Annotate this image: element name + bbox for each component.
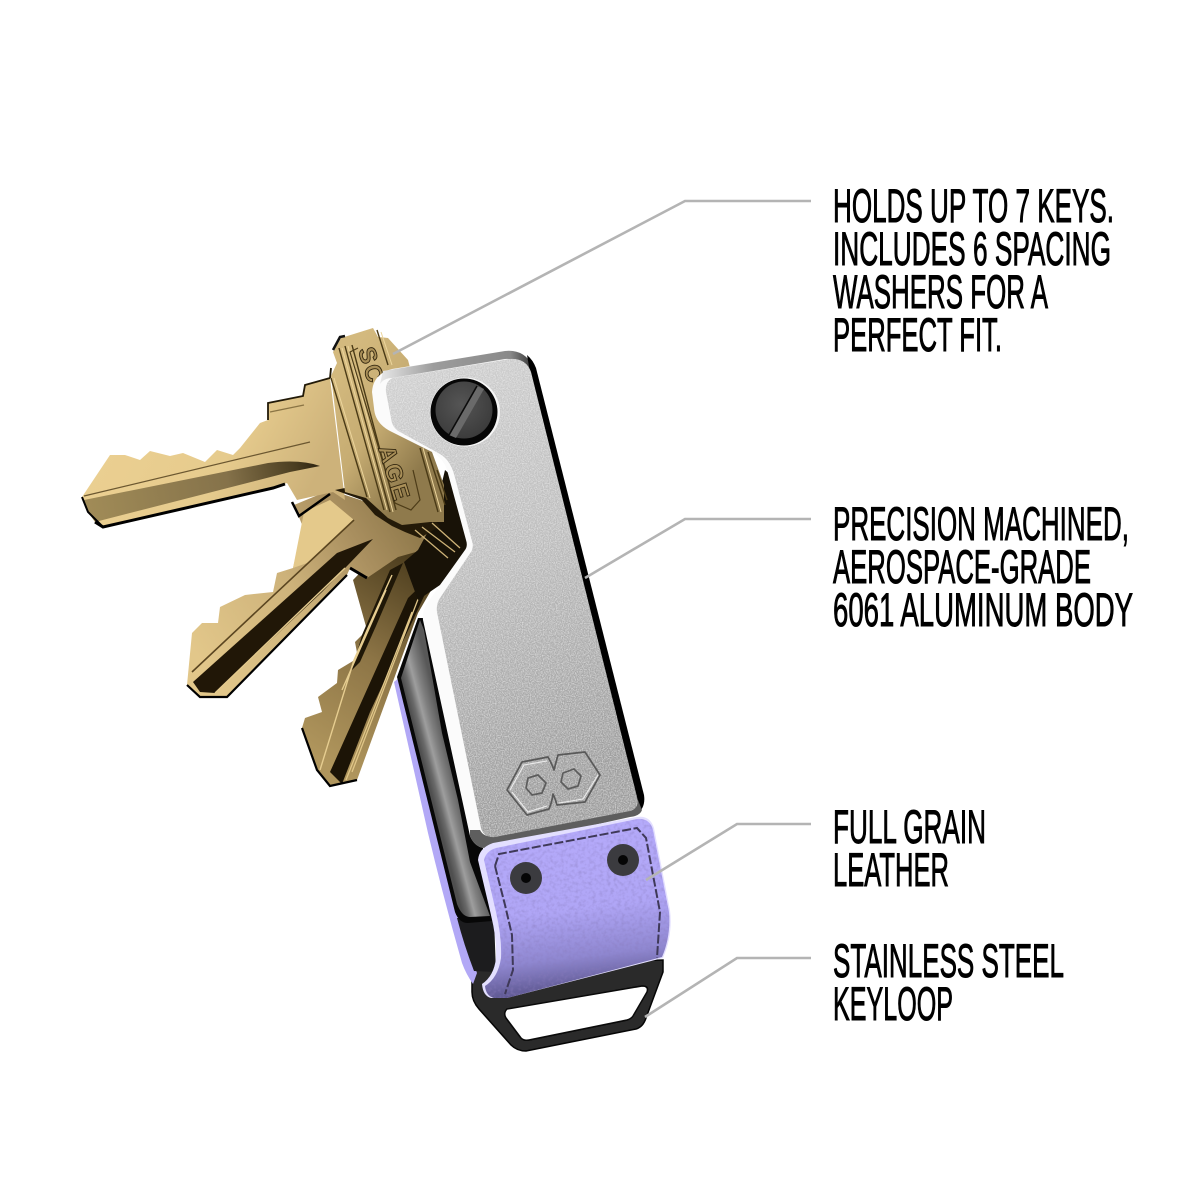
strap shadow gap	[457, 918, 496, 972]
key: middle brass key	[187, 490, 445, 697]
text block: leather	[833, 801, 986, 897]
key: lower brass key	[302, 545, 453, 786]
leather strap front	[478, 817, 671, 998]
text block: aluminum body	[833, 498, 1133, 637]
body outer bevel	[372, 351, 643, 848]
body side wall outer	[397, 618, 492, 923]
strap: back of leather band	[394, 677, 477, 984]
aluminum body	[372, 351, 644, 848]
body brushed face	[386, 359, 638, 837]
illustration: key organizer	[82, 328, 671, 1051]
body bottom bevel	[470, 800, 642, 848]
keyloop: stainless steel	[472, 960, 663, 1051]
head ridges	[331, 330, 447, 512]
leader line: leather	[646, 824, 811, 880]
body side wall	[401, 620, 490, 917]
embossed logo	[507, 752, 600, 815]
brand lettering	[352, 344, 415, 505]
leader line: aluminum body	[585, 519, 811, 578]
dark shadow inside body notch	[404, 470, 468, 600]
body top edge	[380, 351, 533, 384]
leader line: keyloop	[645, 958, 811, 1017]
lower stacked key ridges	[415, 523, 460, 558]
head bottom serrated shadow	[335, 488, 440, 538]
body right black edge	[527, 355, 644, 815]
text block: holds up to 7 keys: PERFECT FIT.	[833, 309, 1002, 362]
key: top brass key	[82, 368, 345, 527]
stitching	[495, 828, 660, 994]
text block: keyloop: KEYLOOP	[833, 978, 953, 1031]
key head with embossed brand	[331, 328, 460, 558]
text block: holds up to 7 keys	[833, 180, 1114, 362]
pivot screw	[430, 378, 500, 446]
brand lettering: AGE	[372, 442, 415, 505]
brand lettering: SC	[352, 344, 389, 387]
rivet left	[510, 862, 542, 894]
text block: leather: LEATHER	[833, 844, 949, 897]
text block: keyloop	[833, 935, 1064, 1031]
text block: leather: FULL GRAIN	[833, 801, 986, 854]
brand plate outline	[350, 348, 420, 510]
rivet right	[607, 844, 639, 876]
leader line: keys	[393, 201, 811, 354]
